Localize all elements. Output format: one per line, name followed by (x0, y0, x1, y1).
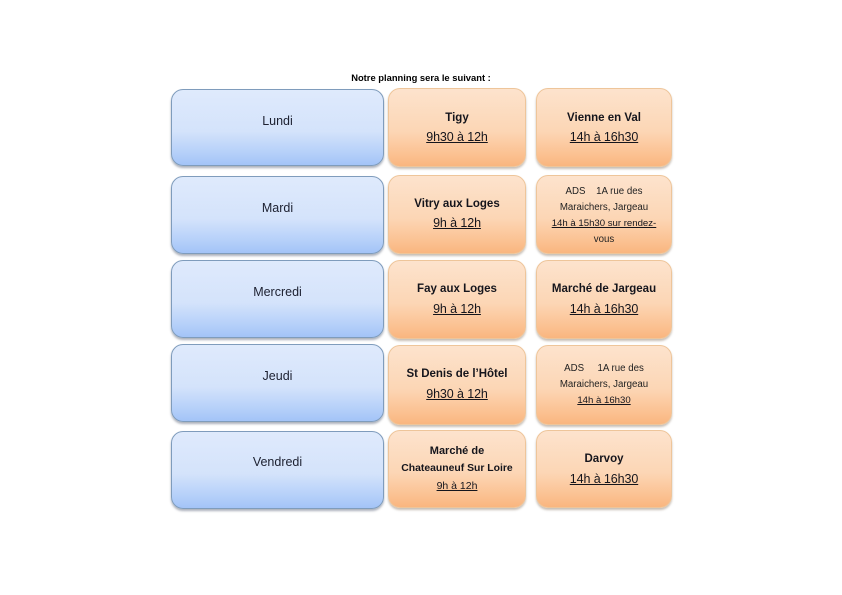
panel: Lundi morning (388, 88, 526, 167)
panel: Vendredi afternoon: 14h à 16h30 (570, 472, 638, 486)
panel: Lundi: Lundi (262, 114, 293, 128)
panel: Mardi afternoon: ADS 1A rue des (565, 186, 642, 197)
panel: Lundi (171, 89, 384, 166)
panel: Lundi morning: Tigy (445, 112, 469, 124)
panel: Mercredi (171, 260, 384, 338)
panel: Jeudi morning: St Denis de l’Hôtel (407, 368, 507, 380)
panel: Mardi morning: 9h à 12h (433, 216, 481, 230)
panel: Jeudi afternoon: ADS 1A rue des (564, 363, 644, 374)
panel: Jeudi afternoon: 14h à 16h30 (577, 395, 631, 406)
panel: Mardi (171, 176, 384, 254)
panel: Mercredi morning (388, 260, 526, 339)
panel: Lundi afternoon (536, 88, 672, 167)
panel: Mardi: Mardi (262, 201, 293, 215)
panel: Vendredi afternoon: Darvoy (584, 453, 624, 465)
panel: Mercredi morning: Fay aux Loges (417, 283, 497, 295)
panel: Vendredi morning (388, 430, 526, 508)
panel: Jeudi (171, 344, 384, 422)
panel: Mercredi: Mercredi (253, 285, 302, 299)
panel: Jeudi morning (388, 345, 526, 425)
panel: Vendredi (171, 431, 384, 509)
panel: Jeudi afternoon: Maraichers, Jargeau (560, 379, 648, 390)
panel: Mercredi morning: 9h à 12h (433, 302, 481, 316)
panel: Mardi morning: Vitry aux Loges (414, 198, 500, 210)
panel: Mardi afternoon: Maraichers, Jargeau (560, 202, 648, 213)
panel: Lundi morning: 9h30 à 12h (426, 130, 488, 144)
panel: Vendredi afternoon (536, 430, 672, 508)
panel: Mardi morning (388, 175, 526, 254)
panel: Mardi afternoon: 14h à 15h30 sur rendez- (552, 218, 656, 229)
panel: Vendredi morning: Chateauneuf Sur Loire (401, 463, 513, 474)
panel: Mercredi afternoon (536, 260, 672, 339)
panel: Mardi afternoon: vous (594, 234, 614, 245)
panel: Vendredi morning: 9h à 12h (437, 480, 477, 492)
panel: Jeudi morning: 9h30 à 12h (426, 387, 488, 401)
panel: Lundi afternoon: Vienne en Val (567, 112, 641, 124)
panel: Mardi afternoon (536, 175, 672, 254)
panel: Vendredi: Vendredi (253, 455, 302, 469)
panel: Mercredi afternoon: Marché de Jargeau (552, 283, 656, 295)
panel: Jeudi afternoon (536, 345, 672, 425)
panel: Jeudi: Jeudi (263, 369, 292, 383)
title: Notre planning sera le suivant : (351, 72, 491, 83)
panel: Vendredi morning: Marché de (430, 445, 484, 457)
panel: Mercredi afternoon: 14h à 16h30 (570, 302, 638, 316)
panel: Lundi afternoon: 14h à 16h30 (570, 130, 638, 144)
